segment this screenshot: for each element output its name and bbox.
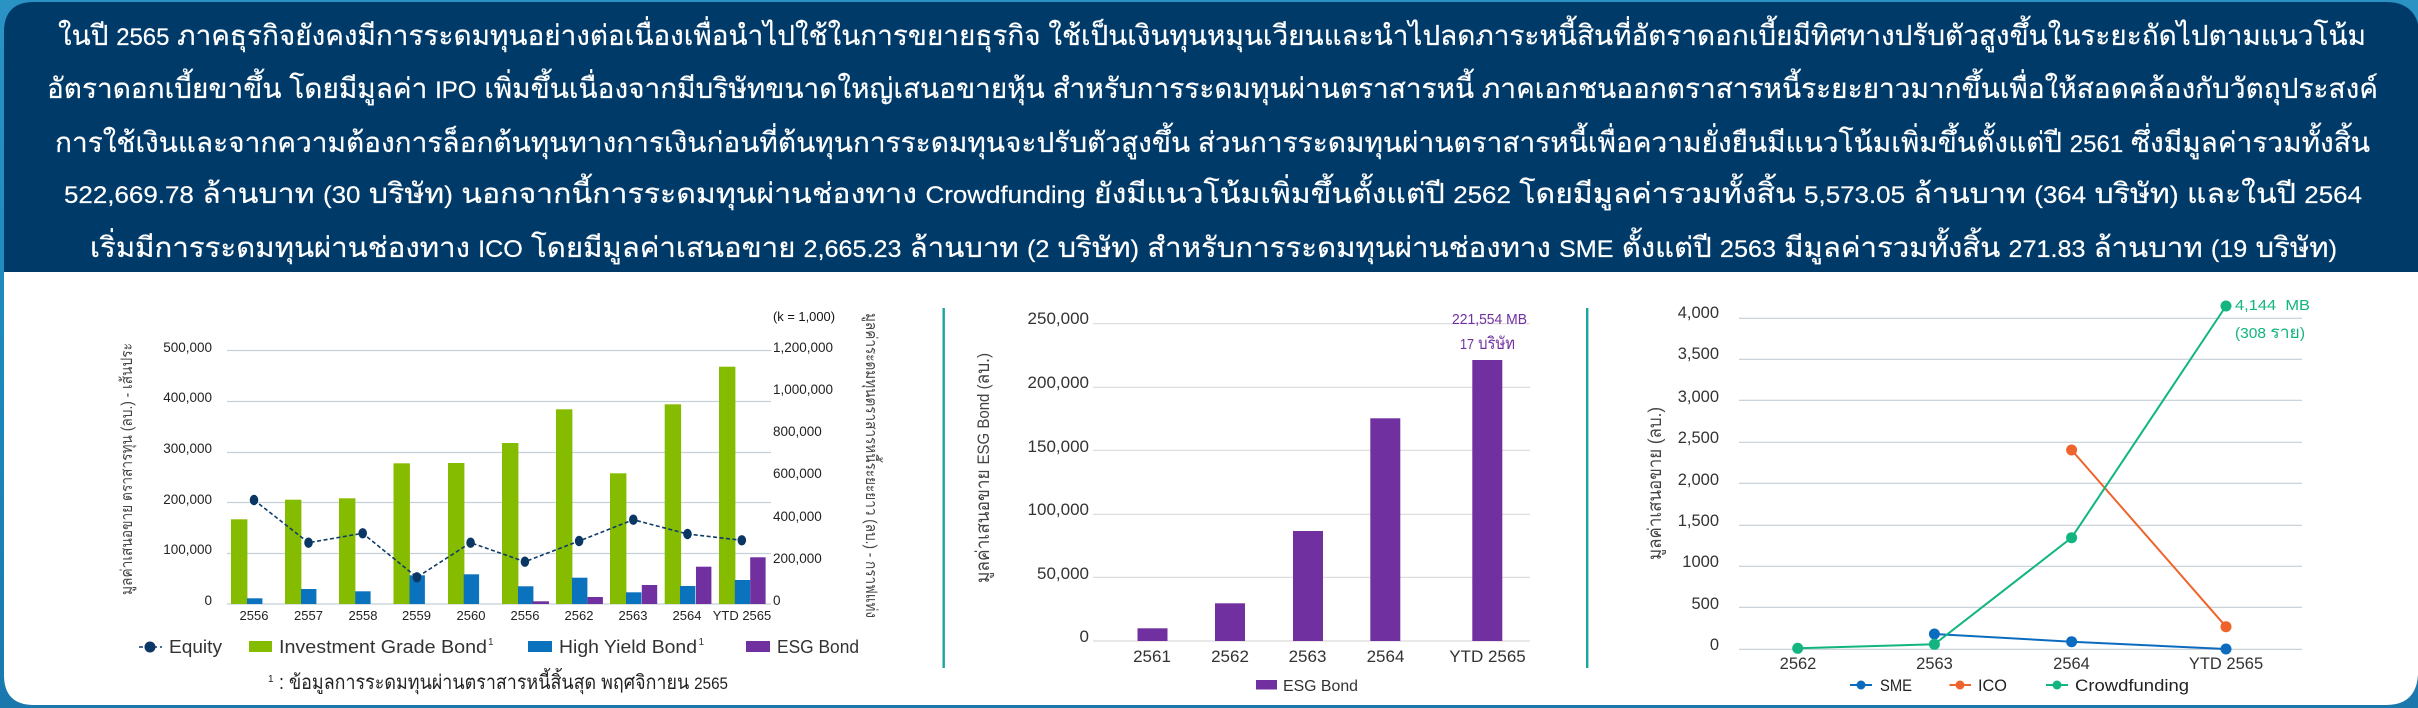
- ICO line: [2066, 444, 2232, 632]
- y axis labels: 1000: [1682, 553, 1719, 571]
- x axis labels: 2557: [294, 608, 323, 623]
- y axis labels: 4,000: [1678, 304, 1719, 322]
- legend: 1: [698, 637, 704, 648]
- high yield bars: [247, 574, 750, 604]
- y axis title: มูลค่าเสนอขาย (ลบ.): [1644, 407, 1666, 560]
- callout: total value: [1452, 312, 1527, 353]
- chart: capital raising combo bar and line: [118, 309, 883, 695]
- summary paragraph: ในปี 2565 ภาคธุรกิจยังคงมีการระดมทุนอย่างต่อเนื่องเพื่อนำไปใช้ในการขยายธุรกิจ ใช้เป็นเงินทุนหมุนเวียนและนำไปลดภาระหนี้สินที่อัตราดอกเบี้ยมีทิศทางปรับตัวสูงขึ้นในระยะถัดไปตามแนวโน้ม: [58, 15, 2366, 53]
- footnote: 1: [268, 674, 274, 685]
- callout: crowdfunding total: [2235, 297, 2310, 342]
- x axis labels: 2563: [619, 608, 647, 623]
- legend: [1850, 677, 2189, 695]
- x axis labels: 2564: [2053, 655, 2090, 673]
- chart: SME ICO Crowdfunding lines: [1644, 297, 2310, 695]
- left axis labels: 0: [204, 593, 212, 608]
- x axis labels: YTD 2565: [713, 608, 771, 623]
- summary paragraph: [47, 15, 2378, 265]
- right axis labels: [773, 340, 833, 608]
- right axis labels: 1,200,000: [773, 340, 833, 355]
- left axis labels: 200,000: [163, 492, 212, 507]
- chart: ESG bond bars: [973, 309, 1530, 695]
- divider: right of ESG chart: [1586, 308, 1588, 668]
- x axis labels: 2562: [565, 608, 593, 623]
- x axis labels: [240, 608, 771, 623]
- y axis labels: 100,000: [1028, 500, 1089, 519]
- bars: [1138, 360, 1502, 641]
- legend: Investment Grade Bond: [279, 637, 487, 657]
- legend: 1: [488, 637, 494, 648]
- left axis labels: 300,000: [163, 441, 212, 456]
- x axis labels: [1133, 647, 1526, 666]
- x axis labels: 2562: [1211, 647, 1249, 666]
- y axis labels: 0: [1080, 627, 1089, 646]
- callout: total value: 221,554 MB: [1452, 312, 1527, 328]
- legend: High Yield Bond: [559, 637, 697, 657]
- y axis labels: [1028, 309, 1089, 646]
- y axis labels: [1678, 304, 1719, 654]
- x axis labels: 2564: [1367, 647, 1404, 666]
- ESG bars: [532, 557, 766, 604]
- panel: white chart area: [4, 260, 2418, 705]
- equity dashed line: [250, 495, 746, 582]
- x axis labels: YTD 2565: [2189, 655, 2263, 673]
- Crowdfunding line: [1792, 300, 2232, 654]
- right axis title: มูลค่าระดมทุนตราสารหนี้ระยะยาว (ลบ.) - กราฟแท่ง: [861, 313, 883, 618]
- summary paragraph: อัตราดอกเบี้ยขาขึ้น โดยมีมูลค่า IPO เพิ่มขึ้นเนื่องจากมีบริษัทขนาดใหญ่เสนอขายหุ้น สำหรับการระดมทุนผ่านตราสารหนี้ ภาคเอกชนออกตราสารหนี้ระยะยาวมากขึ้นเพื่อให้สอดคล้องกับวัตถุประสงค์: [47, 68, 2378, 106]
- legend: Equity: [169, 637, 222, 657]
- y axis labels: 2,500: [1678, 429, 1719, 447]
- SME line: [1929, 628, 2232, 654]
- summary paragraph: การใช้เงินและจากความต้องการล็อกต้นทุนทางการเงินก่อนที่ต้นทุนการระดมทุนจะปรับตัวสูงขึ้น ส่วนการระดมทุนผ่านตราสารหนี้เพื่อความยั่งยืนมีแนวโน้มเพิ่มขึ้นตั้งแต่ปี 2561 ซึ่งมีมูลค่ารวมทั้งสิ้น: [55, 122, 2370, 160]
- x axis labels: 2556: [511, 608, 539, 623]
- left axis title: มูลค่าเสนอขาย ตราสารทุน (ลบ.) - เส้นประ: [118, 343, 137, 595]
- unit note: (k = 1,000): [773, 309, 835, 324]
- x axis labels: 2559: [402, 608, 431, 623]
- y axis title: มูลค่าเสนอขาย ESG Bond (ลบ.): [973, 353, 994, 583]
- x axis labels: 2563: [1916, 655, 1953, 673]
- x axis labels: 2562: [1780, 655, 1816, 673]
- x axis labels: 2563: [1289, 647, 1326, 666]
- right axis labels: 600,000: [773, 466, 822, 481]
- panel: summary text header: [4, 2, 2418, 272]
- callout: total value: 17 บริษัท: [1460, 334, 1515, 353]
- y axis labels: 2,000: [1678, 471, 1719, 489]
- footnote: : ข้อมูลการระดมทุนผ่านตราสารหนี้สิ้นสุด พฤศจิกายน 2565: [279, 668, 728, 695]
- y axis labels: 3,500: [1678, 345, 1719, 363]
- x axis labels: 2558: [349, 608, 377, 623]
- legend: SME: [1880, 677, 1912, 695]
- legend: [139, 637, 859, 657]
- divider: left of ESG chart: [942, 308, 945, 668]
- callout: crowdfunding total: (308 ราย): [2235, 323, 2305, 342]
- investment grade bars: [231, 367, 735, 604]
- y axis labels: 500: [1691, 595, 1719, 613]
- right axis labels: 800,000: [773, 424, 822, 439]
- summary paragraph: 522,669.78 ล้านบาท (30 บริษัท ) นอกจากนี้การระดมทุนผ่านช่องทาง Crowdfunding ยังมีแนวโน้มเพิ่มขึ้นตั้งแต่ปี 2562 โดยมีมูลค่ารวมทั้งสิ้น 5,573.05 ล้านบาท (364 บริษัท ) และในปี 2564: [64, 173, 2362, 211]
- right axis labels: 1,000,000: [773, 382, 833, 397]
- y axis labels: 250,000: [1028, 309, 1089, 328]
- y axis labels: 3,000: [1678, 388, 1719, 406]
- legend: ICO: [1978, 677, 2007, 695]
- summary paragraph: เริ่มมีการระดมทุนผ่านช่องทาง ICO โดยมีมูลค่าเสนอขาย 2,665.23 ล้านบาท (2 บริษัท) สำหรับการระดมทุนผ่านช่องทาง SME ตั้งแต่ปี 2563 มีมูลค่ารวมทั้งสิ้น 271.83 ล้านบาท (19 บริษัท): [90, 227, 2337, 265]
- y axis labels: 150,000: [1028, 437, 1089, 456]
- legend: ESG Bond: [1283, 678, 1358, 695]
- right axis labels: 400,000: [773, 509, 822, 524]
- y axis labels: 0: [1710, 636, 1719, 654]
- x axis labels: 2556: [240, 608, 268, 623]
- y axis labels: 200,000: [1028, 373, 1089, 392]
- y axis labels: 50,000: [1037, 564, 1089, 583]
- left axis labels: 400,000: [163, 390, 212, 405]
- y axis labels: 1,500: [1678, 512, 1719, 530]
- left axis labels: 500,000: [163, 340, 212, 355]
- legend: ESG Bond: [777, 637, 859, 657]
- legend: Crowdfunding: [2075, 677, 2189, 695]
- x axis labels: 2560: [457, 608, 485, 623]
- left axis labels: [163, 340, 212, 608]
- x axis labels: 2564: [673, 608, 701, 623]
- left axis labels: 100,000: [163, 542, 212, 557]
- x axis labels: 2561: [1133, 647, 1171, 666]
- right axis labels: 200,000: [773, 551, 822, 566]
- right axis labels: 0: [773, 593, 781, 608]
- x axis labels: YTD 2565: [1449, 647, 1526, 666]
- x axis labels: [1780, 655, 2263, 673]
- callout: crowdfunding total: 4,144 MB: [2235, 297, 2310, 314]
